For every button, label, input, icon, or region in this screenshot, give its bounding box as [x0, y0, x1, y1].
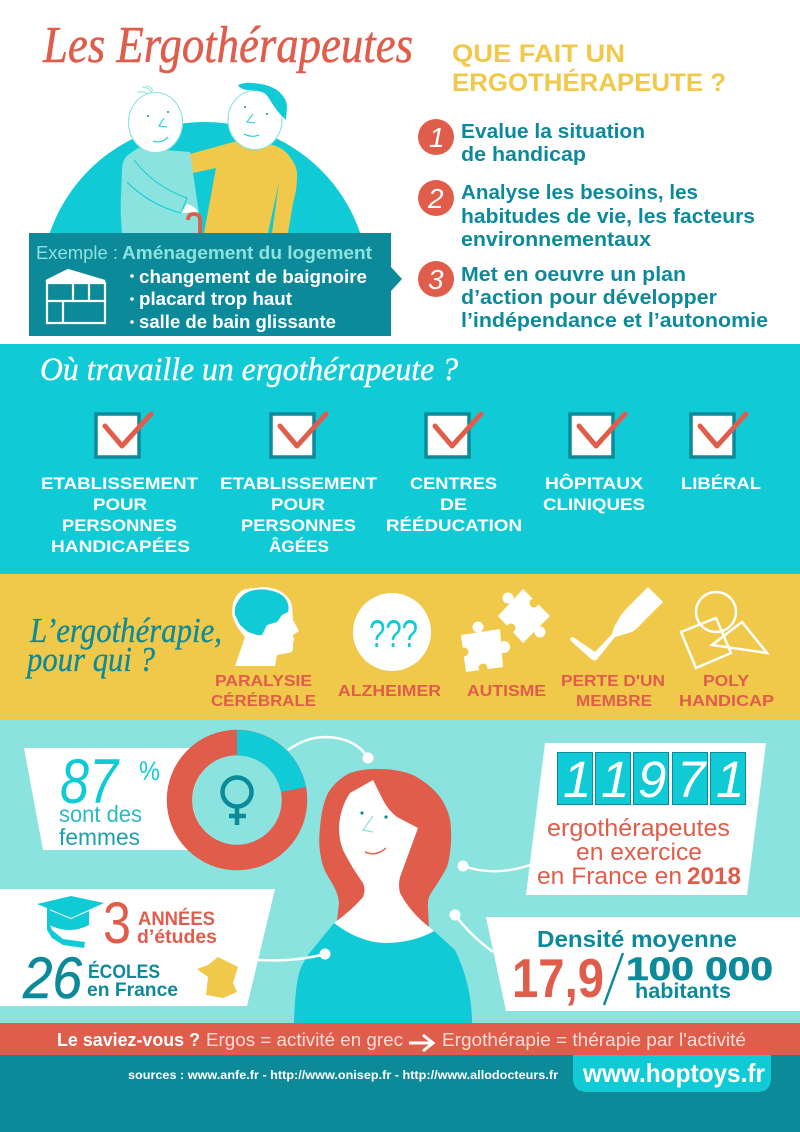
- definition text: Ergothérapie = thérapie par l'activité: [442, 1030, 746, 1050]
- step 3: 3: [428, 264, 444, 295]
- checkbox 5: [691, 414, 746, 457]
- counter digits: [558, 751, 746, 808]
- schools caption: [87, 961, 178, 1001]
- label: disability facilities: POUR: [93, 495, 147, 514]
- step 1: [418, 119, 645, 166]
- step 1: 1: [429, 122, 445, 153]
- connector: density to figure: [450, 910, 493, 952]
- label: cerebral palsy: [211, 673, 316, 710]
- label: disability facilities: HANDICAPÉES: [51, 537, 190, 556]
- workplaces heading: Où travaille un ergothérapeute ?: [40, 352, 458, 388]
- stat: density: [486, 917, 800, 1011]
- percent sign: %: [139, 756, 160, 786]
- step 3: Met en oeuvre un plan: [461, 264, 686, 286]
- example heading: Exemple :: [36, 243, 118, 263]
- heading: what does an OT do: QUE FAIT UN: [452, 40, 625, 68]
- women caption: [59, 801, 142, 850]
- label: limb loss: MEMBRE: [576, 693, 652, 710]
- 3 years number: 3: [103, 891, 131, 956]
- step 2: environnementaux: [461, 229, 651, 251]
- connector: studies to figure: [258, 948, 330, 960]
- list of adaptations: placard trop haut: [139, 288, 292, 309]
- label: elderly facilities: [220, 474, 378, 556]
- label: polyhandicap: POLY: [703, 673, 749, 690]
- example heading bold: Aménagement du logement: [122, 243, 372, 263]
- did you know band: [0, 1023, 800, 1055]
- who-for heading: L’ergothérapie,: [29, 611, 222, 650]
- stat: studies and schools: [0, 889, 275, 1011]
- years caption: ANNÉES: [138, 908, 215, 930]
- connector: women stat to figure: [288, 737, 374, 764]
- icon: house floor plan: [46, 270, 105, 323]
- footer band: [0, 1055, 800, 1132]
- label: hospitals: HÔPITAUX: [545, 474, 644, 493]
- practitioners caption: en France en: [537, 863, 682, 890]
- counter digits: 9: [638, 751, 666, 808]
- label: rehabilitation centres: DE: [440, 495, 467, 514]
- label: cerebral palsy: CÉRÉBRALE: [211, 691, 316, 710]
- website tab: www.hoptoys.fr: [582, 1058, 765, 1088]
- counter digits: 1: [563, 751, 591, 808]
- step 2: Analyse les besoins, les: [461, 182, 698, 204]
- step 1: Evalue la situation: [461, 121, 645, 143]
- label: rehabilitation centres: CENTRES: [410, 474, 497, 493]
- list of adaptations: [130, 266, 367, 332]
- label: elderly facilities: POUR: [271, 495, 325, 514]
- years caption: [137, 908, 217, 948]
- label: elderly facilities: ETABLISSEMENT: [220, 474, 378, 493]
- label: alzheimer: ALZHEIMER: [338, 683, 441, 700]
- panel: who for: [0, 574, 800, 719]
- sources: sources : www.anfe.fr - http://www.onisep.fr - http://www.allodocteurs.fr: [128, 1068, 558, 1082]
- years caption: d’études: [137, 927, 217, 948]
- label: hospitals: [543, 474, 645, 514]
- schools caption: en France: [87, 980, 178, 1001]
- illustration: woman: [294, 769, 472, 1023]
- stat: 87 percent women: [24, 730, 306, 858]
- icon: geometric shapes: [681, 592, 767, 668]
- panel: statistics background: [0, 719, 800, 1023]
- density denominator: habitants: [635, 980, 731, 1003]
- label: limb loss: [561, 673, 665, 710]
- density value: 17,9: [512, 947, 604, 1009]
- checkbox 1: [96, 414, 151, 457]
- counter digits: 1: [716, 751, 744, 808]
- schools caption: ÉCOLES: [88, 961, 160, 983]
- icon: question marks circle: [353, 593, 431, 671]
- icon: head with brain: [232, 587, 299, 666]
- density denominator: 100 000: [626, 951, 773, 987]
- icon: map of France: [197, 957, 238, 998]
- list of adaptations: salle de bain glissante: [139, 311, 336, 332]
- panel: example, home adaptation: [29, 233, 402, 336]
- counter digits: 1: [601, 751, 629, 808]
- illustration: two people on a teal dome: [50, 83, 360, 233]
- icon: puzzle pieces: [460, 589, 550, 672]
- donut chart: [180, 730, 306, 858]
- step 3: [418, 261, 768, 332]
- label: elderly facilities: PERSONNES: [241, 516, 356, 535]
- label: cerebral palsy: PARALYSIE: [215, 673, 312, 690]
- step 3: d’action pour développer: [461, 287, 717, 309]
- label: disability facilities: ETABLISSEMENT: [41, 474, 199, 493]
- stat: 11971 practitioners: [526, 743, 766, 895]
- checkbox 4: [570, 414, 625, 457]
- title: Les Ergothérapeutes: [42, 17, 413, 74]
- label: disability facilities: [41, 474, 199, 556]
- step 2: [418, 180, 755, 251]
- arrow: [409, 1035, 433, 1051]
- practitioners caption: en exercice: [576, 839, 702, 866]
- checkbox 2: [271, 414, 326, 457]
- checkbox 3: [426, 414, 481, 457]
- list of adaptations: changement de baignoire: [139, 266, 367, 287]
- label: polyhandicap: HANDICAP: [679, 693, 774, 710]
- 26 schools number: 26: [22, 946, 83, 1011]
- step 2: 2: [427, 183, 444, 214]
- label: limb loss: PERTE D'UN: [561, 673, 665, 690]
- 87 number: 87: [60, 747, 120, 817]
- density heading: Densité moyenne: [537, 926, 737, 952]
- slash: [604, 953, 623, 1005]
- etymology text: Ergos = activité en grec: [206, 1030, 403, 1050]
- counter digits: 7: [677, 751, 707, 808]
- step 3: l’indépendance et l’autonomie: [461, 310, 768, 332]
- women caption: sont des: [59, 801, 142, 827]
- label: autism: AUTISME: [467, 683, 546, 700]
- step 2: habitudes de vie, les facteurs: [461, 206, 755, 228]
- did-you-know lead: Le saviez-vous ?: [57, 1030, 200, 1050]
- label: elderly facilities: ÂGÉES: [269, 537, 329, 556]
- panel: workplaces: [0, 344, 800, 574]
- heading: what does an OT do: ERGOTHÉRAPEUTE ?: [452, 68, 726, 97]
- women caption: femmes: [59, 824, 140, 850]
- connector: practitioners to figure: [458, 860, 530, 872]
- who-for heading: pour qui ?: [24, 640, 155, 679]
- label: hospitals: CLINIQUES: [543, 495, 645, 514]
- density denominator: [626, 951, 773, 1003]
- icon: prosthetic limb: [570, 587, 663, 660]
- practitioners caption: [537, 815, 741, 890]
- label: private practice: LIBÉRAL: [681, 474, 761, 493]
- icon: question marks circle: ???: [369, 613, 418, 656]
- label: rehabilitation centres: [386, 474, 522, 535]
- icon: female symbol: [222, 778, 252, 825]
- step 1: de handicap: [461, 144, 586, 166]
- icon: graduation cap: [37, 896, 104, 948]
- label: polyhandicap: [679, 673, 774, 710]
- label: rehabilitation centres: RÉÉDUCATION: [386, 516, 522, 535]
- practitioners caption: ergothérapeutes: [547, 815, 730, 842]
- heading: what does an OT do: [452, 40, 726, 97]
- label: disability facilities: PERSONNES: [62, 516, 177, 535]
- who-for heading: [24, 611, 222, 679]
- practitioners caption: 2018: [687, 863, 741, 890]
